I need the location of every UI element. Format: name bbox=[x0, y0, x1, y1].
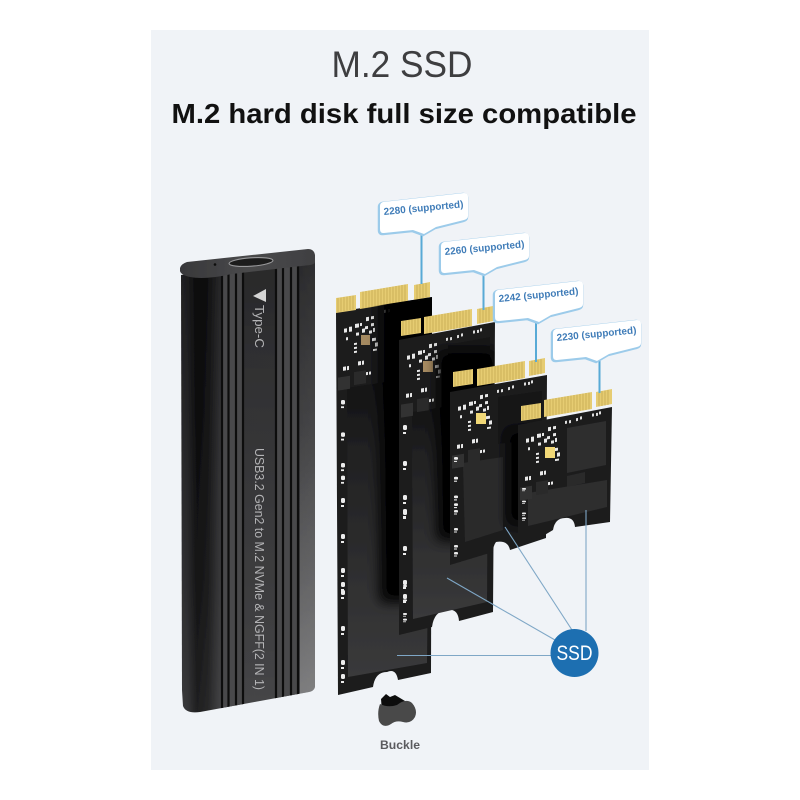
enclosure: USB to M.2 aluminium case bbox=[180, 249, 316, 715]
SSD board 2280 bbox=[336, 282, 440, 695]
cooling ribs bbox=[222, 265, 298, 715]
badge: SSD: SSD bbox=[556, 642, 592, 665]
label: Buckle: Buckle bbox=[380, 738, 420, 752]
callout: 2230: 2230 (supported) bbox=[556, 325, 637, 344]
callout: 2230 bbox=[552, 320, 641, 393]
callout: 2280 bbox=[379, 193, 468, 284]
callout: 2242: 2242 (supported) bbox=[498, 286, 579, 305]
label: product description: USB3.2 Gen2 to M.2 NVMe & NGFF(2 IN 1) bbox=[252, 448, 267, 690]
SSD board 2242 bbox=[450, 358, 557, 565]
callout leaders to SSD badge bbox=[397, 510, 586, 656]
top cap bbox=[180, 249, 315, 278]
SSD board 2260 bbox=[399, 306, 497, 635]
title: M.2 SSD: M.2 SSD bbox=[332, 44, 472, 85]
indicator hole bbox=[214, 263, 216, 266]
subtitle: M.2 hard disk full size compatible bbox=[172, 98, 636, 129]
callout: 2260 bbox=[440, 233, 529, 310]
USB-C port bbox=[229, 256, 273, 268]
SSD board 2230 bbox=[518, 389, 612, 541]
background panel bbox=[151, 30, 649, 770]
icon: rubber buckle bbox=[378, 694, 416, 726]
callout: 2260: 2260 (supported) bbox=[444, 239, 525, 258]
callout: 2280: 2280 (supported) bbox=[383, 199, 464, 218]
callout: 2242 bbox=[494, 281, 583, 362]
label: Type-C: Type-C bbox=[252, 305, 267, 348]
badge: SSD bbox=[550, 629, 598, 677]
arrow marker on case bbox=[253, 289, 266, 302]
right side highlight bbox=[300, 350, 315, 694]
